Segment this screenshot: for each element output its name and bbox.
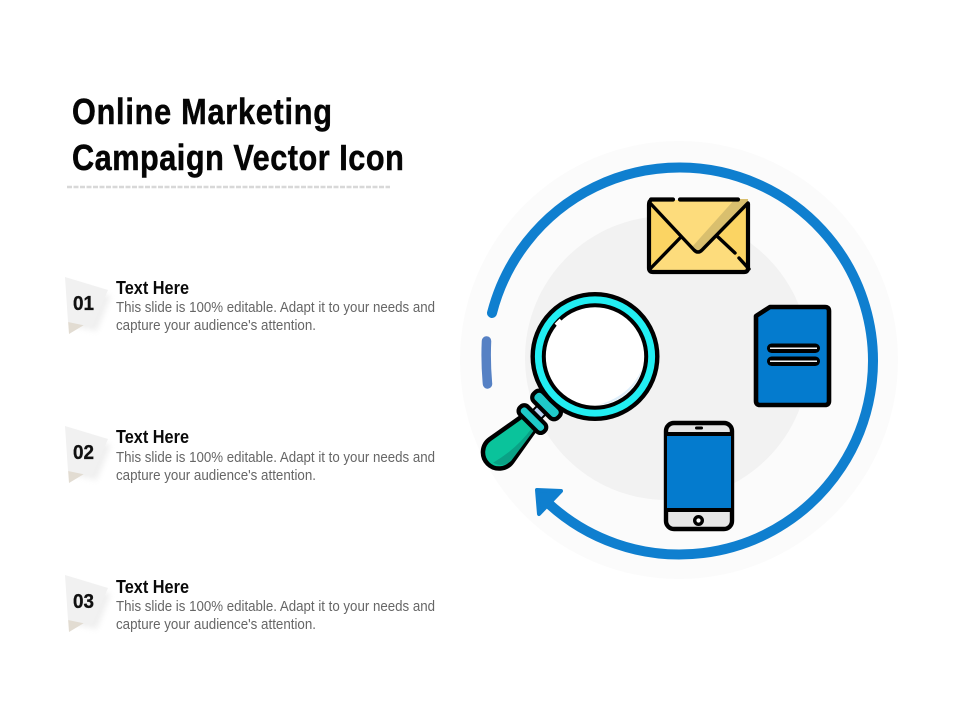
circular illustration [460, 141, 898, 579]
description 01: This slide is 100% editable. Adapt it to your needs and [116, 300, 435, 316]
item 01 [65, 277, 435, 334]
heading 01: Text Here [116, 278, 189, 298]
handle [476, 410, 541, 475]
badge 03 [65, 575, 111, 632]
lens ring [533, 294, 657, 419]
circular arrow [492, 168, 873, 555]
title [72, 92, 404, 179]
item 03 [65, 575, 435, 633]
description 03: This slide is 100% editable. Adapt it to your needs and [116, 599, 435, 615]
description 01 [116, 300, 435, 334]
lens shading [598, 369, 642, 405]
icon: envelope [649, 199, 749, 272]
arc dash [486, 341, 488, 384]
icon: smartphone [666, 423, 732, 529]
badge 01: 01 [73, 293, 94, 315]
inner gray circle [525, 216, 809, 500]
title: Online Marketing [72, 92, 332, 133]
description 01: capture your audience's attention. [116, 318, 316, 334]
icon: magnifying glass [476, 294, 657, 476]
icon: document [756, 307, 829, 405]
title: Campaign Vector Icon [72, 138, 404, 179]
badge 03: 03 [73, 591, 94, 613]
badge 01 [65, 277, 111, 334]
badge 02: 02 [73, 442, 94, 464]
description 02: capture your audience's attention. [116, 468, 316, 484]
description 03 [116, 599, 435, 633]
description 02 [116, 450, 435, 484]
heading 02: Text Here [116, 427, 189, 447]
ring gap highlight [556, 320, 561, 325]
description 03: capture your audience's attention. [116, 617, 316, 633]
outer pale circle [460, 141, 898, 579]
badge 02 [65, 426, 111, 483]
item 02 [65, 426, 435, 484]
heading 03: Text Here [116, 577, 189, 597]
description 02: This slide is 100% editable. Adapt it to your needs and [116, 450, 435, 466]
